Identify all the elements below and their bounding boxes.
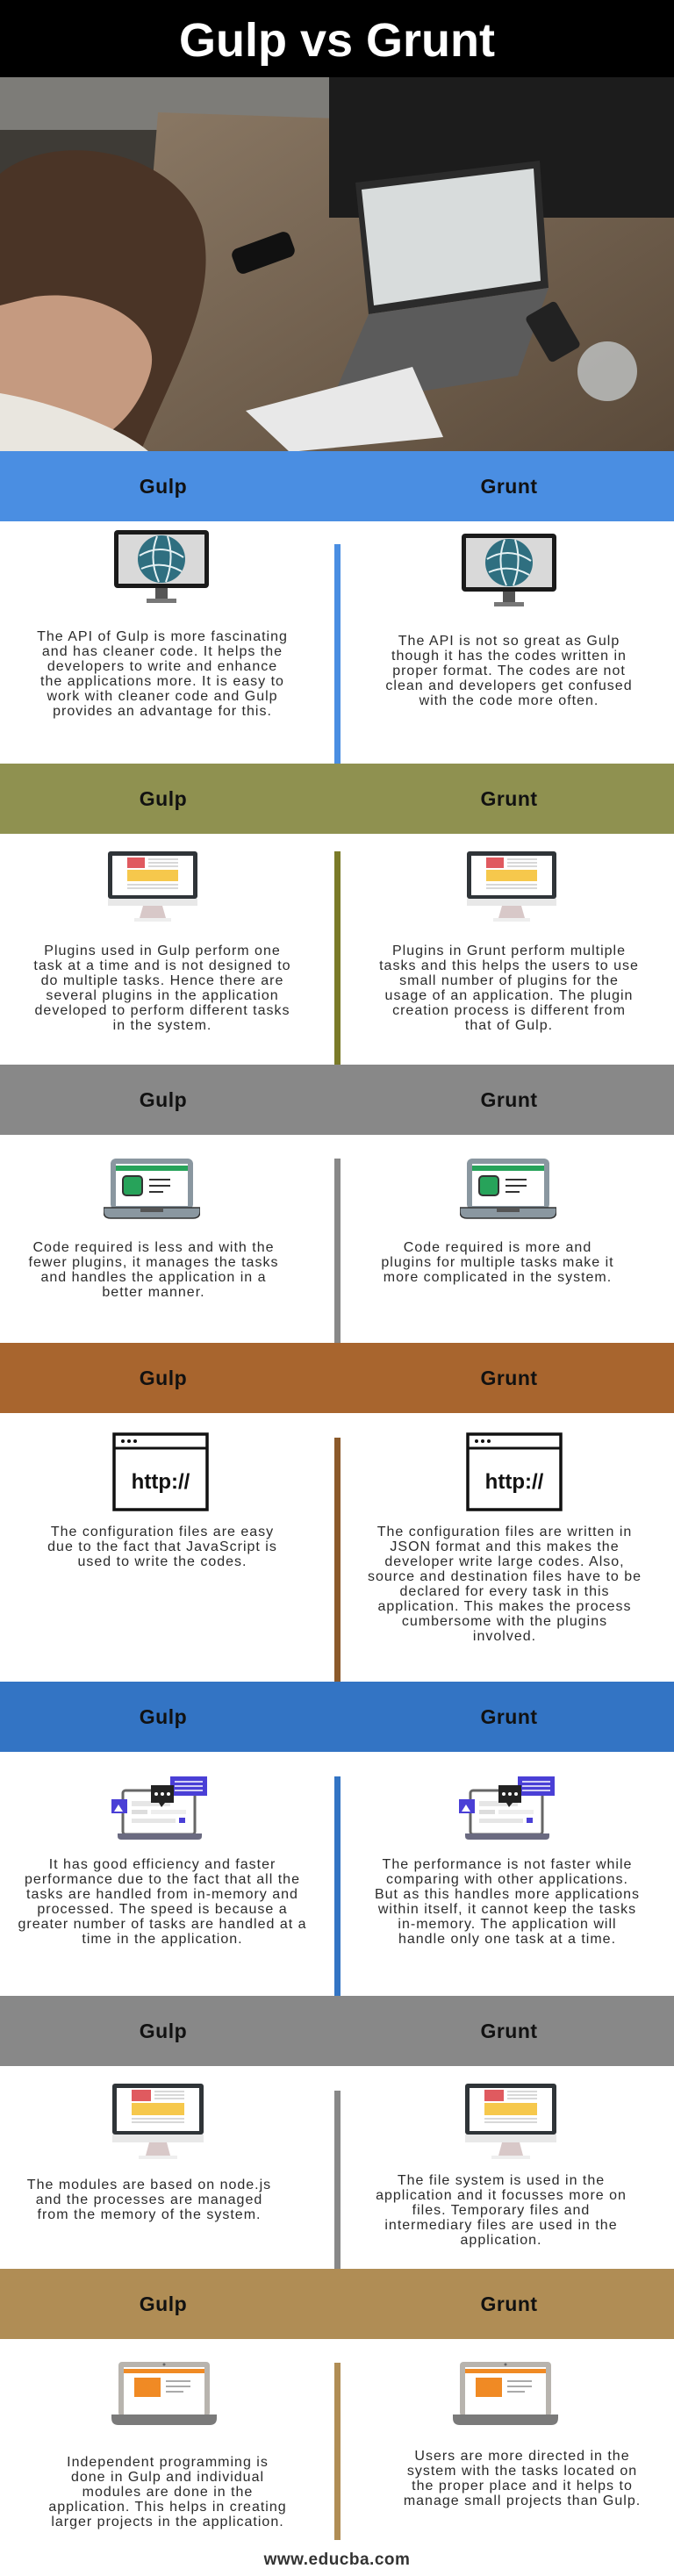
text: gulp independent programming: modules are done in the [82,2485,253,2500]
text: grunt config: cumbersome with the plugins [402,1614,607,1629]
header 4: Gulp [140,1367,187,1389]
text: grunt API: The API is not so great as Gulp [398,634,620,649]
text: gulp independent programming: application. This helps in creating [48,2500,287,2515]
text: grunt performance: in-memory. The application will [398,1917,617,1932]
text: grunt file system [376,2173,627,2248]
header 1: Grunt [480,475,538,498]
icon: laptop chat grunt [459,1776,555,1840]
text: grunt code: Code required is more and [404,1240,592,1255]
text: grunt plugins: usage of an application. The plugin [385,988,633,1003]
divider 3 [334,1159,341,1343]
text: gulp plugins: in the system. [113,1018,212,1033]
header 2 [0,764,674,834]
icon: monitor red yellow gulp 2 [112,2084,204,2159]
icon: globe monitor gulp [114,530,209,603]
divider 7 [334,2363,341,2540]
text: gulp API: work with cleaner code and Gulp [47,689,278,704]
text: grunt API [385,634,633,708]
header 4: Grunt [480,1367,538,1389]
header 5 [0,1682,674,1752]
text: grunt file system: intermediary files are used in the [384,2218,618,2233]
text: grunt file system: files. Temporary files and [412,2203,590,2218]
icon: orange laptop grunt [453,2362,558,2425]
text: gulp plugins [33,944,291,1033]
text: gulp performance: time in the application. [82,1932,243,1947]
header 2: Gulp [140,787,187,810]
text: gulp performance: It has good efficiency and faster [49,1857,276,1872]
divider 4 [334,1438,341,1682]
text: grunt users: Users are more directed in the [414,2449,630,2464]
header 7: Grunt [480,2293,538,2315]
text: gulp performance [18,1857,307,1947]
text: grunt config: JSON format and this makes the [390,1539,620,1554]
text: grunt config: developer write large codes. Also, [384,1554,625,1569]
text: grunt performance: comparing with other applications. [386,1872,628,1887]
header 7 [0,2269,674,2339]
text: gulp code: Code required is less and with the [32,1240,275,1255]
header 3: Grunt [480,1088,538,1111]
text: grunt plugins: tasks and this helps the users to use [379,958,639,973]
divider 1 [334,544,341,764]
icon: http window grunt: http:// [485,1470,544,1494]
header 1 [0,451,674,521]
icon: http window gulp: http:// [132,1470,190,1494]
text: grunt config: involved. [473,1629,536,1644]
icon: monitor red yellow grunt [467,851,556,922]
icon: monitor red yellow grunt 2 [465,2084,556,2159]
text: gulp config [47,1525,277,1569]
header 6: Grunt [480,2020,538,2042]
header 3: Gulp [140,1088,187,1111]
text: gulp code [28,1240,278,1300]
header 3 [0,1065,674,1135]
text: grunt plugins: creation process is different from [392,1003,626,1018]
text: gulp API: provides an advantage for this. [53,704,272,719]
text: grunt performance: within itself, it cannot keep the tasks [378,1902,636,1917]
header 2: Grunt [480,787,538,810]
text: gulp plugins: do multiple tasks. Hence there are [41,973,283,988]
text: grunt config: declared for every task in this [399,1584,610,1599]
header 4 [0,1343,674,1413]
icon: http window gulp [112,1432,209,1511]
icon: green laptop gulp [104,1159,200,1219]
text: grunt API: though it has the codes written in [391,649,627,664]
text: grunt file system: The file system is used in the [398,2173,605,2188]
header 5: Grunt [480,1705,538,1728]
text: gulp config: used to write the codes. [77,1554,247,1569]
header 5: Gulp [140,1705,187,1728]
text: gulp code: better manner. [102,1285,205,1300]
text: gulp modules [27,2178,271,2222]
text: gulp plugins: Plugins used in Gulp perform one [44,944,281,958]
text: gulp independent programming: done in Gulp and individual [71,2470,264,2485]
icon: laptop chat gulp [111,1776,207,1840]
divider 2 [334,851,341,1065]
text: gulp independent programming [48,2455,287,2529]
text: gulp modules: from the memory of the system. [38,2207,261,2222]
text: grunt API: with the code more often. [419,693,599,708]
text: grunt config: The configuration files are written in [377,1525,632,1539]
header 6: Gulp [140,2020,187,2042]
header 7: Gulp [140,2293,187,2315]
title: Gulp vs Grunt [179,14,495,67]
text: grunt file system: application. [461,2233,541,2248]
icon: http window grunt [466,1432,563,1511]
text: gulp config: The configuration files are easy [51,1525,274,1539]
text: gulp performance: processed. The speed is because a [37,1902,288,1917]
text: gulp API: developers to write and enhance [47,659,277,674]
text: grunt API: clean and developers get confused [385,678,633,693]
footer: www.educba.com [264,2551,410,2569]
text: gulp API: the applications more. It is easy to [40,674,284,689]
text: grunt file system: application and it focusses more on [376,2188,627,2203]
text: grunt config: source and destination files have to be [368,1569,642,1584]
divider 5 [334,1776,341,1996]
text: grunt plugins [379,944,639,1033]
text: gulp config: due to the fact that JavaScript is [47,1539,277,1554]
text: gulp plugins: task at a time and is not designed to [33,958,291,973]
text: gulp API: The API of Gulp is more fascinating [37,629,288,644]
divider 6 [334,2091,341,2269]
text: grunt users: the proper place and it helps to [412,2479,633,2493]
text: grunt performance: handle only one task at a time. [398,1932,616,1947]
text: grunt code: more complicated in the system. [384,1270,612,1285]
text: grunt config: application. This makes the process [377,1599,632,1614]
text: gulp independent programming: Independent programming is [67,2455,269,2470]
text: grunt performance: The performance is not faster while [383,1857,632,1872]
title [0,0,674,77]
text: grunt config [368,1525,642,1644]
text: gulp modules: and the processes are managed [36,2192,262,2207]
icon: globe monitor grunt [462,534,556,606]
header 6 [0,1996,674,2066]
icon: green laptop grunt [460,1159,556,1219]
text: gulp performance: tasks are handled from in-memory and [26,1887,298,1902]
text: gulp API: and has cleaner code. It helps the [42,644,283,659]
text: gulp API [37,629,288,719]
text: grunt API: proper format. The codes are not [392,664,626,678]
text: grunt plugins: that of Gulp. [465,1018,553,1033]
text: gulp plugins: several plugins in the application [46,988,279,1003]
text: gulp plugins: developed to perform different tasks [35,1003,290,1018]
text: gulp performance: performance due to the fact that all the [25,1872,300,1887]
text: grunt performance [375,1857,640,1947]
icon: orange laptop gulp [111,2362,217,2425]
text: grunt users [404,2449,641,2508]
header 1: Gulp [140,475,187,498]
text: gulp code: fewer plugins, it manages the tasks [29,1255,278,1270]
photo: developer at laptop [0,77,674,451]
text: grunt code: plugins for multiple tasks make it [381,1255,614,1270]
text: grunt users: system with the tasks located on [407,2464,637,2479]
text: grunt plugins: small number of plugins for the [399,973,619,988]
icon: monitor red yellow gulp [108,851,197,922]
text: gulp performance: greater number of tasks are handled at a [18,1917,307,1932]
text: grunt users: manage small projects than Gulp. [404,2493,641,2508]
text: gulp independent programming: larger projects in the application. [51,2515,284,2529]
text: grunt performance: But as this handles more applications [375,1887,640,1902]
text: grunt code [381,1240,614,1285]
text: grunt plugins: Plugins in Grunt perform multiple [392,944,626,958]
text: gulp code: and handles the application in a [40,1270,267,1285]
text: gulp modules: The modules are based on node.js [27,2178,271,2192]
